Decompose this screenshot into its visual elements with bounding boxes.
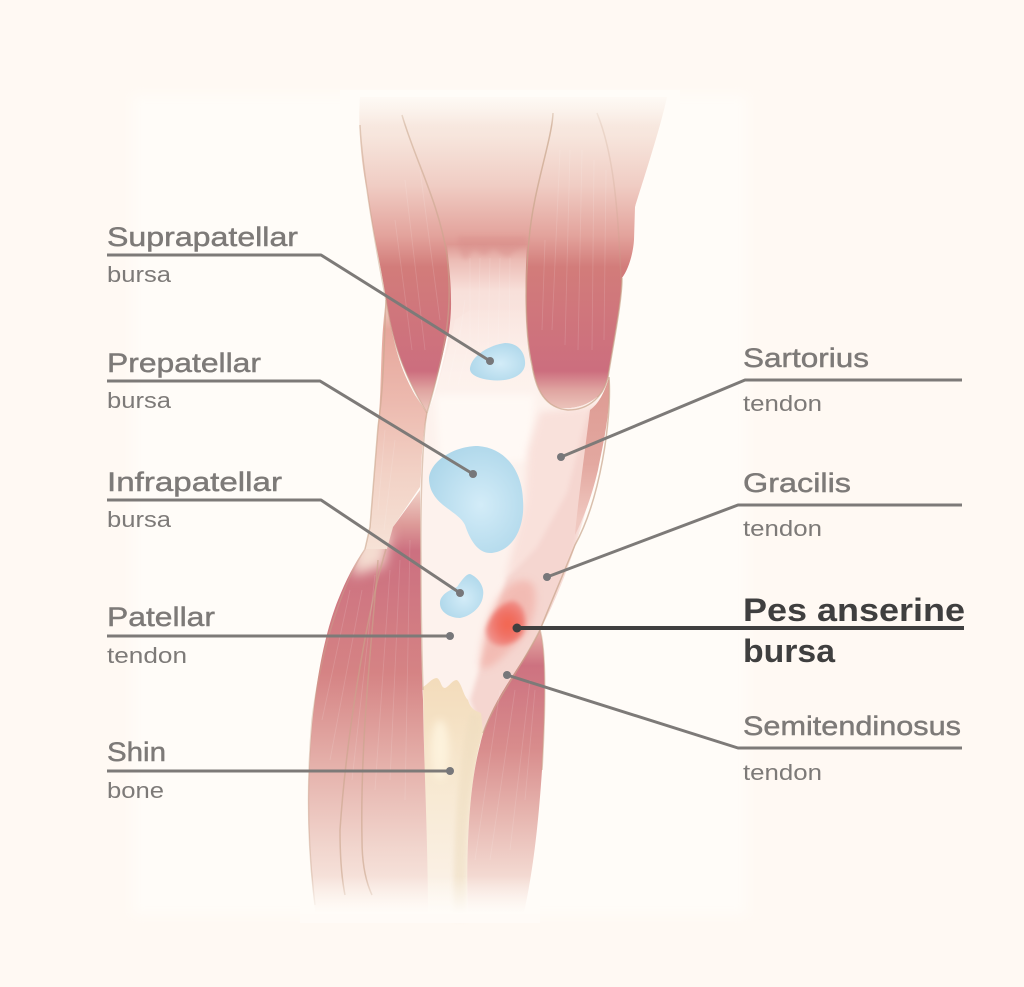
- pink right capsule: [508, 406, 592, 572]
- gracilis tendon band: [469, 420, 588, 730]
- label: Prepatellar bursa: [107, 348, 477, 478]
- top fade: [340, 90, 680, 126]
- label: Patellar tendon: Patellar: [107, 602, 215, 632]
- label: Patellar tendon: tendon: [107, 643, 187, 668]
- inflammation core: [486, 601, 525, 646]
- inflamed pes anserine bursa: [480, 580, 536, 668]
- label: Shin bone: bone: [107, 778, 164, 803]
- bursa: suprapatellar: [470, 343, 525, 380]
- muscle outlines: [360, 125, 427, 413]
- label: Infrapatellar bursa: Infrapatellar: [107, 467, 282, 497]
- pale upper lateral fade: [352, 530, 392, 576]
- outer thigh band: [365, 300, 427, 550]
- bottom mask: [300, 914, 540, 923]
- label: Sartorius tendon: Sartorius: [743, 343, 869, 373]
- thigh muscle silhouette: [359, 97, 667, 413]
- label: Sartorius tendon: tendon: [743, 391, 822, 416]
- label: Gracilis tendon: [543, 468, 962, 581]
- label: Semitendinosus tendon: Semitendinosus: [743, 711, 961, 741]
- label: Infrapatellar bursa: [107, 467, 464, 597]
- label: Semitendinosus tendon: tendon: [743, 760, 822, 785]
- medial lower leg muscle: [467, 630, 545, 920]
- lateral lower leg muscle: [308, 490, 428, 920]
- sartorius band: [575, 377, 609, 535]
- label: Pes anserine bursa: [512, 592, 965, 669]
- knee capsule and patellar tendon: [420, 310, 608, 733]
- illustration: knee muscles, tendons, bone: [300, 90, 680, 923]
- knee anatomy infographic: [107, 112, 964, 904]
- label: Shin bone: [107, 737, 454, 803]
- label: Pes anserine bursa: bursa: [743, 633, 835, 669]
- pale central capsule: [435, 395, 535, 470]
- label: Gracilis tendon: tendon: [743, 516, 822, 541]
- label: Suprapatellar bursa: bursa: [107, 262, 172, 287]
- label: Suprapatellar bursa: [107, 222, 494, 365]
- muscle fibres: [322, 150, 606, 860]
- tendon fringe: [458, 236, 527, 259]
- shin bone: [423, 678, 483, 920]
- label: Infrapatellar bursa: bursa: [107, 507, 172, 532]
- bursa: infrapatellar: [440, 574, 483, 618]
- label: Semitendinosus tendon: [503, 671, 962, 785]
- label: Gracilis tendon: Gracilis: [743, 468, 851, 498]
- label: Pes anserine bursa: Pes anserine: [743, 592, 965, 628]
- quadriceps tendon: [430, 245, 568, 410]
- bone shading: [454, 712, 482, 920]
- bursa: prepatellar: [429, 446, 523, 553]
- lower capsule fill: [421, 398, 596, 470]
- label: Prepatellar bursa: bursa: [107, 388, 172, 413]
- inflammation halo: [480, 580, 536, 668]
- label: Suprapatellar bursa: Suprapatellar: [107, 222, 298, 252]
- label: Shin bone: Shin: [107, 737, 166, 767]
- label: Patellar tendon: [107, 602, 454, 668]
- label: Sartorius tendon: [557, 343, 962, 461]
- bottom fade: [300, 876, 540, 914]
- label: Prepatellar bursa: Prepatellar: [107, 348, 261, 378]
